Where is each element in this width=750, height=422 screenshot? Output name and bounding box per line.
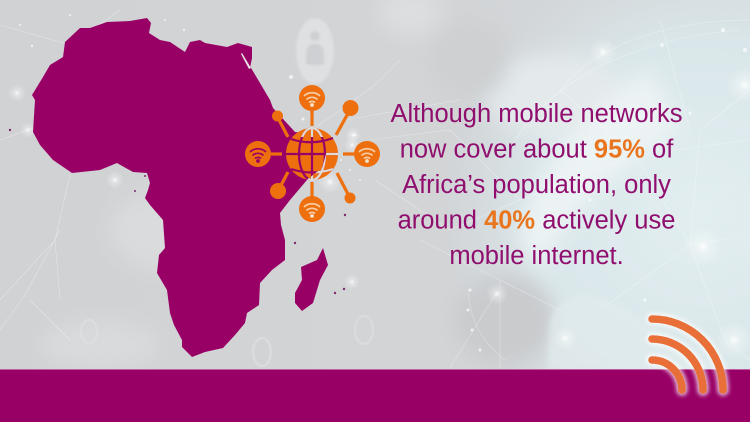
wifi node: bottom	[299, 196, 325, 222]
icon: globe network	[245, 85, 380, 222]
wifi node: top	[299, 85, 325, 111]
globe	[286, 128, 338, 180]
footer band	[0, 369, 750, 422]
wifi node: left	[245, 141, 271, 167]
connector lines	[271, 108, 356, 198]
text block: mobile internet statistic: Africa’s population, only	[402, 171, 671, 199]
text block: mobile internet statistic: now cover about 95% of	[400, 136, 673, 164]
map: Red Sea sliver	[241, 53, 251, 69]
map: small islands	[9, 129, 346, 294]
logo: signal arcs	[652, 319, 723, 390]
node dots	[270, 100, 358, 204]
text block: mobile internet statistic: mobile internet.	[449, 242, 624, 270]
text block: mobile internet statistic: around 40% actively use	[398, 206, 675, 234]
map: Africa	[32, 18, 330, 357]
wifi node: right	[354, 141, 380, 167]
text block: mobile internet statistic: Although mobile networks	[390, 100, 682, 128]
map: Madagascar	[295, 248, 328, 311]
icon: person in oval	[296, 18, 334, 84]
